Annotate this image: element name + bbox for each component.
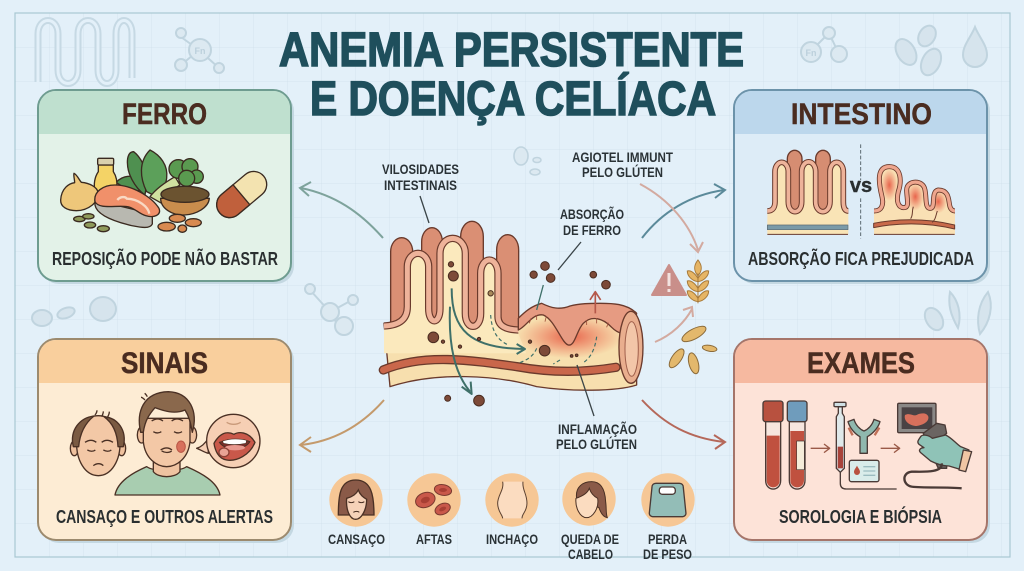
label: absorção de ferro [560, 205, 624, 238]
icon: background cells middle left [32, 297, 116, 326]
symptom: queda de cabelo [561, 472, 619, 562]
symptom row [328, 472, 695, 562]
title: ANEMIA PERSISTENTE [279, 24, 744, 77]
blood vessel [383, 360, 616, 371]
absorption arrows [450, 285, 543, 394]
symptom: perda de peso [641, 473, 695, 562]
arrow: to exames [642, 400, 725, 449]
symptom: cansaço: CANSAÇO [328, 531, 385, 547]
label: agiotel immunt: AGIOTEL IMMUNT [572, 149, 673, 165]
symptom: aftas: AFTAS [416, 531, 452, 547]
leader lines [420, 196, 594, 416]
iron particles [428, 262, 610, 406]
icon: background molecule right: Fn [806, 48, 816, 58]
heading: sinais: SINAIS [121, 347, 208, 380]
body tissue [384, 323, 637, 390]
caption: ferro: REPOSIÇÃO PODE NÃO BASTAR [52, 248, 278, 269]
caption: exames: SOROLOGIA E BIÓPSIA [779, 506, 942, 527]
icon: symptomatic people [70, 392, 260, 495]
panel: intestino [734, 90, 990, 284]
label: vilosidades intestinais: INTESTINAIS [384, 177, 457, 193]
inflamed mucosa [518, 303, 637, 380]
caption: sinais: CANSAÇO E OUTROS ALERTAS [56, 507, 273, 527]
label: absorção de ferro: ABSORÇÃO [560, 205, 624, 222]
arrow: to intestino [642, 184, 725, 238]
symptom: inchaço: INCHAÇO [486, 531, 538, 547]
arrow: grains to gut [655, 307, 693, 342]
icon: background molecule left: Fn [194, 46, 206, 56]
panel: exames [734, 339, 990, 543]
label: vs: vs [850, 175, 872, 197]
icon: iron rich foods [61, 150, 272, 232]
icon: background villi outline [38, 20, 132, 84]
panel: sinais [38, 339, 294, 543]
label: absorção de ferro: DE FERRO [563, 222, 621, 238]
symptom: cansaço [328, 473, 385, 547]
symptom: inchaço [485, 473, 539, 547]
diagram: intestine cross section [383, 221, 643, 406]
arrow: gluten to wheat [640, 184, 703, 252]
label: agiotel immunt [572, 149, 673, 180]
symptom: aftas [407, 473, 461, 547]
back villi [391, 221, 519, 328]
arrow: to ferro [300, 182, 383, 238]
icon: warning triangle [652, 265, 686, 295]
panel: ferro [38, 90, 294, 284]
label: inflamação pelo glúten: INFLAMAÇÃO [558, 420, 637, 437]
label: agiotel immunt: PELO GLÚTEN [582, 163, 663, 180]
icon: background molecule left [175, 28, 224, 73]
label: inflamação pelo glúten [556, 420, 637, 452]
icon: background drop [963, 27, 987, 67]
icon: background leaves right [921, 292, 991, 334]
icon: background cells centre [514, 147, 541, 175]
tube opening [619, 311, 643, 383]
symptom: queda de cabelo: QUEDA DE [561, 531, 619, 547]
heading: ferro: FERRO [122, 98, 207, 131]
symptom: perda de peso: PERDA [648, 531, 687, 547]
front villi [384, 238, 527, 353]
symptom: perda de peso: DE PESO [643, 546, 692, 562]
icon: grains [667, 323, 717, 375]
icon: background molecule right [801, 27, 847, 62]
icon: tests and endoscopy [763, 401, 972, 489]
icon: healthy vs damaged villi [767, 144, 955, 238]
title: E DOENÇA CELÍACA [310, 72, 716, 126]
title [279, 24, 744, 126]
symptom: queda de cabelo: CABELO [568, 546, 613, 562]
heading: exames: EXAMES [807, 347, 915, 380]
heading: intestino: INTESTINO [791, 98, 932, 131]
arrow: to sinais [300, 400, 384, 452]
label: vilosidades intestinais [382, 161, 459, 193]
icon: wheat [687, 260, 709, 303]
label: inflamação pelo glúten: PELO GLÚTEN [556, 435, 637, 452]
icon: background blood cells [891, 22, 945, 78]
icon: background molecule middle left [305, 284, 358, 335]
label: vilosidades intestinais: VILOSIDADES [382, 161, 459, 177]
